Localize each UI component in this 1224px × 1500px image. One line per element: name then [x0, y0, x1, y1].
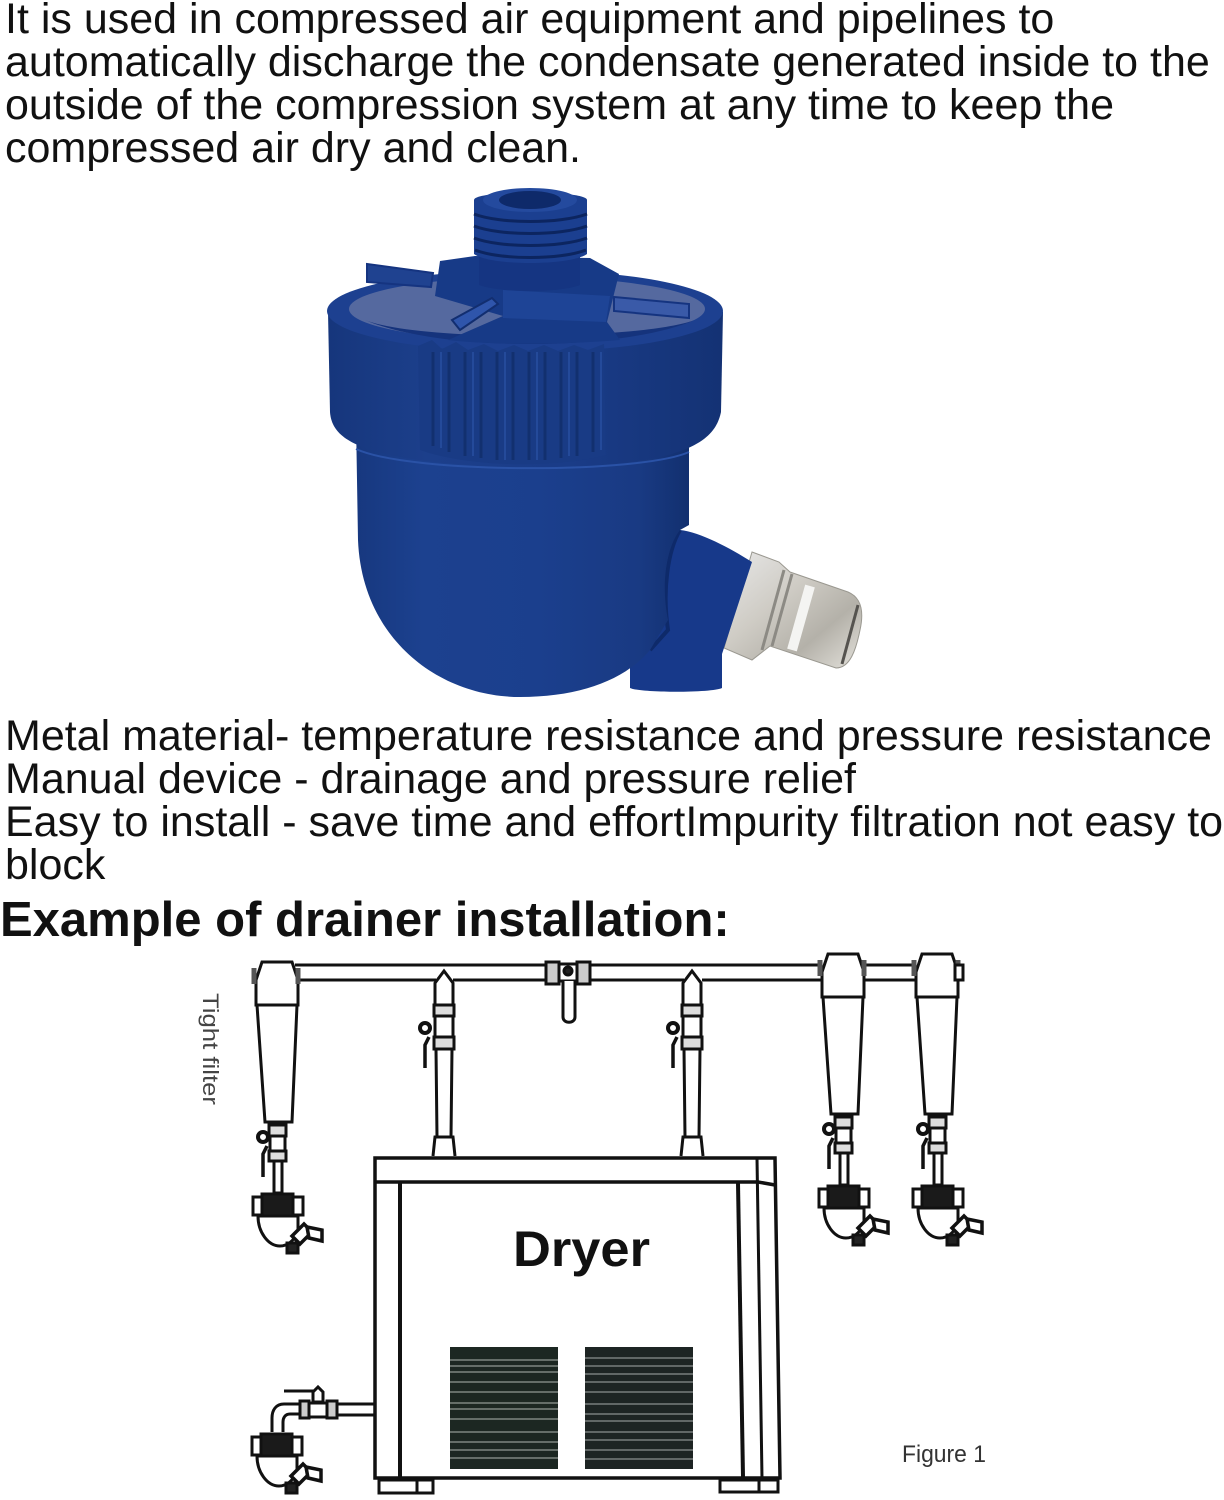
feature list text [5, 712, 1223, 889]
filter and drainer: right 1 [819, 954, 888, 1245]
lower cup body [356, 420, 689, 697]
vent grille: right [585, 1347, 693, 1469]
end cap [955, 965, 963, 980]
threads [474, 192, 587, 263]
intro text block [5, 0, 1210, 172]
vent grille: left [450, 1347, 558, 1469]
intro text block: compressed air dry and clean. [5, 124, 581, 172]
feature list text: block [5, 841, 106, 889]
filter and drainer: right 2 [913, 954, 982, 1245]
tight filter label: Tight filter [198, 993, 223, 1105]
drop pipe: right [668, 971, 703, 1156]
left tab [367, 264, 433, 287]
feature list text: Manual device - drainage and pressure relief [5, 755, 857, 803]
drop pipe: left [420, 971, 455, 1156]
heading: Example of drainer installation: [0, 893, 730, 947]
filter and drainer: left [253, 962, 322, 1253]
cap inner face [349, 277, 705, 341]
dryer label: Dryer [513, 1221, 650, 1277]
intro text block: automatically discharge the condensate generated inside to the [5, 38, 1210, 86]
collar [328, 312, 723, 468]
intro text block: outside of the compression system at any time to keep the [5, 81, 1114, 129]
central T valve [546, 962, 590, 1022]
feature list text: Metal material- temperature resistance and pressure resistance [5, 712, 1212, 760]
installation diagram [198, 954, 986, 1493]
feature list text: Easy to install - save time and effortImpurity filtration not easy to [5, 798, 1223, 846]
inlet opening [483, 188, 577, 212]
threaded neck [479, 245, 580, 291]
outlet blue housing [630, 530, 752, 692]
ribbed grip [418, 340, 606, 464]
outlet metal connector [724, 552, 862, 668]
air pipe [295, 965, 915, 980]
figure label: Figure 1 [902, 1441, 986, 1468]
right tab [614, 297, 689, 318]
dryer cabinet [375, 1158, 780, 1493]
front tab [452, 298, 498, 330]
hex nut [435, 256, 620, 344]
lower-left drainer and valve [252, 1387, 375, 1493]
product photo: blue automatic drain valve [327, 188, 862, 697]
